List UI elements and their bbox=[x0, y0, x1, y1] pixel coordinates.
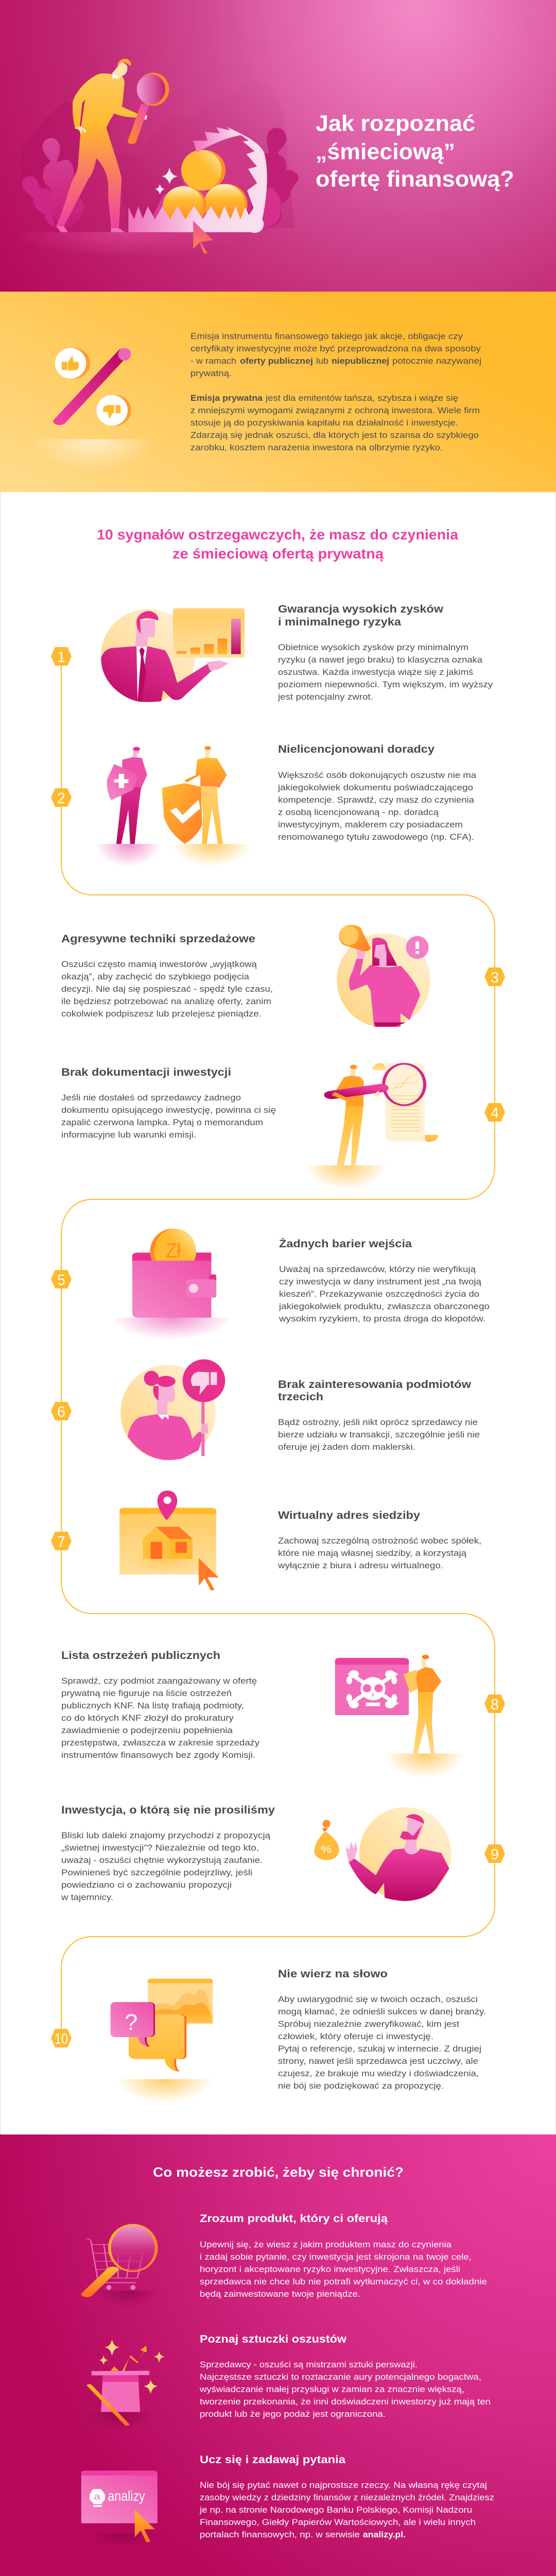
text: oszustwa. Każda inwestycja wiąże się z jakimś bbox=[278, 667, 473, 677]
text: przestępstwa, zwłaszcza w zakresie sprzedaży bbox=[61, 1738, 260, 1748]
illustration: bearded man refusing money bag bbox=[314, 1807, 451, 1901]
text: wysokim ryzykiem, to prosta droga do kłopotów. bbox=[279, 1314, 485, 1324]
title: Jak rozpoznać bbox=[316, 111, 475, 136]
illustration: woman with thumbs down sign bbox=[120, 1359, 225, 1460]
number badge 5: 5 bbox=[57, 1272, 65, 1289]
item 4 bbox=[61, 1063, 505, 1215]
text: czujesz, że brakuje mu wiedzy i doświadczenia, bbox=[278, 2069, 479, 2078]
text: dokumentu opisującego inwestycję, powinna ci się bbox=[61, 1105, 276, 1115]
text: Oszuści często mamią inwestorów „wyjątkową bbox=[61, 959, 257, 969]
number badge 1: 1 bbox=[57, 649, 65, 666]
number badge 6 bbox=[51, 1402, 72, 1420]
icon: browser with analizy logo: analizy bbox=[108, 2488, 145, 2504]
text: mogą kłamać, że odnieśli sukces w danej branży. bbox=[278, 2007, 486, 2016]
number badge 7: 7 bbox=[57, 1534, 65, 1550]
text: Wirtualny adres siedziby bbox=[278, 1509, 420, 1521]
text: ryzyku (a nawet jego braku) to klasyczna oznaka bbox=[278, 655, 483, 665]
text: trzecich bbox=[278, 1391, 323, 1403]
intro text: Emisja instrumentu finansowego takiego jak akcje, obligacje czy bbox=[190, 331, 463, 341]
icon: browser with analizy logo: a bbox=[94, 2492, 100, 2501]
text: z osobą licencjonowaną - np. doradcą bbox=[278, 807, 439, 817]
intro text: oferty publicznej bbox=[240, 356, 313, 366]
text: Uważaj na sprzedawców, którzy nie weryfikują bbox=[279, 1264, 476, 1274]
illustration: wallet with coin bbox=[116, 1228, 228, 1338]
text: kompetencje. Sprawdź, czy masz do czynienia bbox=[278, 795, 475, 805]
tip 3 bbox=[81, 2453, 494, 2563]
text: uważaj - oszuści chętnie wykorzystują zaufanie. bbox=[61, 1855, 263, 1865]
text: Aby uwiarygodnić się w twoich oczach, oszuści bbox=[278, 1994, 478, 2004]
text bbox=[61, 933, 273, 1019]
intro text: z mniejszymi wymogami związanymi z ochroną inwestora. Wiele firm bbox=[190, 405, 480, 415]
number badge 8: 8 bbox=[491, 1697, 499, 1713]
text: co do których KNF złożył do prokuratury bbox=[61, 1713, 234, 1723]
text: Nie wierz na słowo bbox=[278, 1968, 388, 1980]
illustration: two advisers with shields bbox=[96, 746, 252, 889]
number badge 4: 4 bbox=[491, 1105, 499, 1122]
text: Ucz się i zadawaj pytania bbox=[200, 2453, 346, 2466]
number badge 1 bbox=[51, 647, 72, 666]
panel: hero header bbox=[0, 0, 556, 292]
illustration: bearded man refusing money bag: % bbox=[321, 1844, 332, 1855]
text: Nie bój się pytać nawet o najprostsze rzeczy. Na własną rękę czytaj bbox=[200, 2481, 487, 2490]
text: tworzenie przekonania, że inni doświadczeni inwestorzy już mają ten bbox=[200, 2397, 491, 2406]
number badge 5 bbox=[51, 1270, 72, 1289]
number badge 4 bbox=[484, 1103, 505, 1122]
text: informacyjne lub warunki emisji. bbox=[61, 1130, 196, 1140]
text: i minimalnego ryzyka bbox=[278, 616, 402, 628]
title: „śmieciową” bbox=[316, 139, 455, 164]
text: analizy.pl. bbox=[363, 2530, 406, 2539]
text: Żadnych barier wejścia bbox=[279, 1238, 412, 1250]
text: okazją”, aby zachęcić do szybkiego podjęcia bbox=[61, 972, 250, 981]
number badge 9 bbox=[484, 1844, 505, 1863]
text bbox=[61, 1066, 276, 1140]
text: powiedziano ci o zachowaniu propozycji bbox=[61, 1880, 232, 1890]
heading: Co możesz zrobić, żeby się chronić? bbox=[153, 2164, 404, 2180]
item 1 bbox=[51, 603, 493, 702]
text: Bliski lub daleki znajomy przychodzi z propozycją bbox=[61, 1831, 271, 1840]
illustration: man with magnifier and document bbox=[305, 1063, 438, 1215]
item 9 bbox=[61, 1804, 505, 1902]
icon: browser with analizy logo bbox=[81, 2470, 158, 2563]
text: inwestycyjnym, maklerem czy posiadaczem bbox=[278, 820, 463, 829]
number badge 6: 6 bbox=[57, 1404, 65, 1420]
text: je np. na stronie Narodowego Banku Polskiego, Komisji Nadzoru bbox=[199, 2505, 472, 2515]
illustration: man inspecting trap with coins bbox=[14, 59, 299, 284]
text bbox=[199, 2453, 494, 2539]
intro text: certyfikaty inwestycyjne może być przeprowadzona na dwa sposoby bbox=[190, 344, 481, 353]
illustration: virtual office window bbox=[119, 1490, 219, 1590]
text: Inwestycja, o którą się nie prosiliśmy bbox=[61, 1804, 275, 1816]
text: wyświadczanie małej przysługi w zamian za znacznie większą, bbox=[199, 2385, 464, 2394]
text: publicznych KNF. Na listę trafiają podmioty, bbox=[61, 1701, 244, 1710]
text: Lista ostrzeżeń publicznych bbox=[61, 1649, 220, 1662]
heading: 10 sygnałów ostrzegawczych, że masz do czynienia bbox=[97, 527, 458, 543]
number badge 2: 2 bbox=[57, 790, 65, 807]
icon: percent sign with thumbs bbox=[32, 348, 156, 504]
text: kieszeń”. Przekazywanie oszczędności życia do bbox=[279, 1289, 479, 1299]
title: ofertę finansową? bbox=[316, 166, 514, 192]
text: Zachowaj szczególną ostrożność wobec spółek, bbox=[278, 1536, 481, 1546]
text: Brak zainteresowania podmiotów bbox=[278, 1378, 471, 1391]
text: i zadaj sobie pytanie, czy inwestycja jest skrojona na twoje cele, bbox=[200, 2252, 472, 2262]
text: Spróbuj niezależnie zweryfikować, kim jest bbox=[278, 2019, 459, 2029]
intro text: lub bbox=[316, 356, 328, 366]
text: Poznaj sztuczki oszustów bbox=[200, 2333, 346, 2345]
text: Brak dokumentacji inwestycji bbox=[61, 1066, 231, 1078]
text bbox=[199, 2333, 491, 2419]
intro text: zarobku, kosztem narażenia inwestora na olbrzymie ryzyko. bbox=[190, 443, 443, 452]
text: Obietnice wysokich zysków przy minimalnym bbox=[278, 642, 468, 652]
text: nie bój sie podziękować za propozycję. bbox=[278, 2081, 444, 2091]
text: Jeśli nie dostałeś od sprzedawcy żadnego bbox=[61, 1093, 241, 1103]
text: bierze udziału w transakcji, szczególnie jeśli nie bbox=[278, 1430, 480, 1439]
text: zasoby wiedzy z dziedziny finansów z niezależnych źródeł. Znajdziesz bbox=[200, 2493, 494, 2502]
heading bbox=[97, 527, 458, 562]
text: Najczęstsze sztuczki to roztaczanie aury potencjalnego bogactwa, bbox=[200, 2372, 481, 2382]
intro text: jest dla emitentów tańsza, szybsza i wiąże się bbox=[265, 393, 458, 403]
text bbox=[278, 1968, 486, 2091]
text: sprzedawca nie chce lub nie potrafi wytłumaczyć ci, w co dokładnie bbox=[200, 2277, 487, 2286]
number badge 10: 10 bbox=[55, 2031, 68, 2047]
intro text: - w ramach bbox=[190, 356, 236, 366]
text: cokolwiek podpiszesz lub przelejesz pieniądze. bbox=[61, 1009, 262, 1019]
text: horyzont i akceptowane ryzyko inwestycyjne. Zwłaszcza, jeśli bbox=[200, 2265, 460, 2274]
intro text: potocznie nazywanej bbox=[392, 356, 481, 366]
text: zapalić czerwona lampka. Pytaj o memorandum bbox=[61, 1117, 263, 1127]
illustration: skull warning panel bbox=[335, 1655, 464, 1803]
text: zawiadmienie o podejrzeniu popełnienia bbox=[61, 1725, 233, 1735]
text: Upewnij się, że wiesz z jakim produktem masz do czynienia bbox=[200, 2240, 452, 2249]
number badge 7 bbox=[51, 1532, 72, 1550]
text: strony, nawet jeśli sprzedawca jest uczciwy, ale bbox=[278, 2056, 478, 2066]
number badge 3 bbox=[484, 968, 505, 986]
text: Sprawdź, czy podmiot zaangażowany w ofertę bbox=[61, 1676, 257, 1686]
text bbox=[277, 743, 477, 842]
text: Finansowego, Giełdy Papierów Wartościowych, ale i wielu innych bbox=[200, 2518, 476, 2527]
item 2 bbox=[51, 743, 477, 889]
text: produkt lub że jego podaż jest ograniczona. bbox=[200, 2410, 386, 2419]
illustration: speech bubbles and chart window: ? bbox=[125, 2010, 137, 2035]
heading: ze śmieciową ofertą prywatną bbox=[172, 546, 384, 562]
text: decyzji. Nie daj się pospieszać - spędź tyle czasu, bbox=[61, 984, 273, 994]
illustration: speech bubbles and chart window bbox=[111, 1979, 213, 2127]
panel: intro bbox=[0, 292, 556, 504]
text: jakiegokolwiek dokumentu poświadczającego bbox=[277, 783, 473, 792]
text: jakiegokolwiek produktu, zwłaszcza obarczonego bbox=[279, 1301, 490, 1311]
text: portalach finansowych, np. w serwisie bbox=[200, 2530, 360, 2539]
text: oferuje jej żaden dom maklerski. bbox=[278, 1442, 415, 1452]
number badge 8 bbox=[484, 1694, 505, 1713]
item 5 bbox=[51, 1229, 490, 1361]
text: Nielicencjonowani doradcy bbox=[278, 743, 435, 755]
panel: how to protect yourself bbox=[0, 2134, 556, 2576]
text: człowiek, który oferuje ci inwestycję. bbox=[278, 2031, 433, 2041]
text: instrumentów finansowych bez zgody Komisji. bbox=[61, 1750, 255, 1760]
text: ile będziesz potrzebować na analizę oferty, zanim bbox=[61, 996, 271, 1006]
text bbox=[200, 2212, 487, 2299]
tip 1 bbox=[86, 2212, 487, 2325]
text: „świetnej inwestycji”? Niezależnie od tego kto, bbox=[61, 1843, 259, 1853]
number badge 2 bbox=[51, 788, 72, 807]
text: Bądź ostrożny, jeśli nikt oprócz sprzedawcy nie bbox=[278, 1417, 478, 1427]
illustration: businessman with chart bbox=[101, 608, 245, 702]
timeline line bbox=[61, 656, 495, 2029]
item 7 bbox=[51, 1490, 481, 1590]
text bbox=[61, 1804, 275, 1902]
text: czy inwestycja w dany instrument jest „na twoją bbox=[279, 1277, 482, 1286]
intro text: stosuje ją do pozyskiwania kapitału na działalność i inwestycje. bbox=[190, 418, 458, 428]
item 3 bbox=[61, 925, 505, 1027]
item 10 bbox=[51, 1968, 486, 2127]
text: prywatną nie figuruje na liście ostrzeżeń bbox=[61, 1688, 232, 1698]
intro text: Emisja prywatna bbox=[190, 393, 263, 403]
intro text: prywatną. bbox=[190, 368, 232, 378]
tip 2 bbox=[85, 2333, 491, 2450]
text bbox=[61, 1649, 260, 1760]
number badge 9: 9 bbox=[491, 1846, 499, 1863]
icon: magic hat with wand bbox=[85, 2340, 165, 2450]
text: wyłącznie z biura i adresu wirtualnego. bbox=[277, 1561, 443, 1570]
intro text: Zdarzają się jednak oszuści, dla których jest to szansa do szybkiego bbox=[190, 430, 479, 440]
text: Sprzedawcy - oszuści są mistrzami sztuki perswazji. bbox=[200, 2360, 418, 2369]
text: które nie mają własnej siedziby, a korzystają bbox=[278, 1548, 467, 1558]
illustration: woman with megaphone bbox=[337, 925, 430, 1027]
text bbox=[278, 1378, 480, 1452]
item 6 bbox=[51, 1359, 480, 1460]
text bbox=[277, 603, 493, 702]
text: w tajemnicy. bbox=[61, 1892, 113, 1902]
text: renomowanego tytułu zawodowego (np. CFA). bbox=[278, 832, 474, 842]
panel: 10 warning signals bbox=[0, 492, 556, 2134]
number badge 3: 3 bbox=[491, 970, 499, 986]
text: jest potencjalny zwrot. bbox=[277, 692, 373, 702]
intro text: niepublicznej bbox=[332, 356, 389, 366]
text: poziomem niepewności. Tym większym, im wyższy bbox=[278, 680, 493, 689]
coin stack bbox=[163, 150, 248, 226]
intro text bbox=[190, 331, 481, 452]
text: będą zainwestowane twoje pieniądze. bbox=[200, 2290, 360, 2299]
text: Powinieneś być szczególnie podejrzliwy, jeśli bbox=[61, 1868, 252, 1877]
text: Większość osób dokonujących oszustw nie ma bbox=[278, 770, 477, 780]
text: Pytaj o referencje, szukaj w internecie. Z drugiej bbox=[278, 2044, 481, 2054]
title bbox=[316, 111, 514, 192]
item 8 bbox=[61, 1649, 505, 1803]
illustration: wallet with coin: Zł bbox=[166, 1240, 181, 1262]
text: Agresywne techniki sprzedażowe bbox=[61, 933, 255, 945]
text: Gwarancja wysokich zysków bbox=[278, 603, 443, 615]
icon: shopping cart with magnifier bbox=[86, 2224, 160, 2325]
text bbox=[279, 1238, 490, 1324]
text: Zrozum produkt, który ci oferują bbox=[200, 2212, 388, 2225]
text bbox=[277, 1509, 481, 1570]
